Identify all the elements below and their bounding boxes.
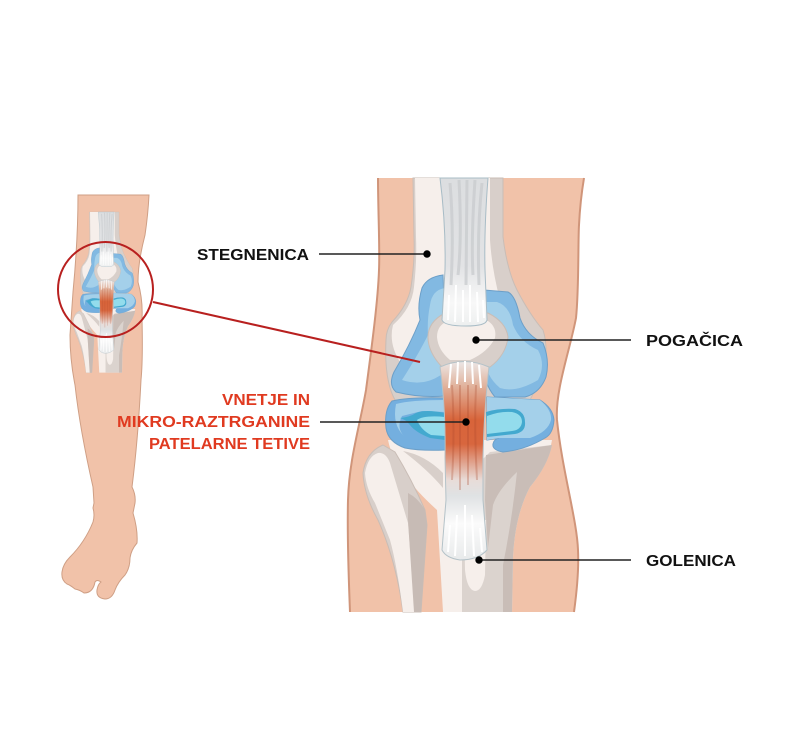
zoom connector line [153, 302, 420, 362]
label: inflammation and micro-tears: MIKRO-RAZTRGANINE [117, 414, 310, 431]
label: inflammation and micro-tears: PATELARNE TETIVE [149, 436, 310, 453]
label: pogacica [472, 331, 743, 350]
label: golenica: GOLENICA [646, 553, 736, 570]
label: pogacica: POGAČICA [646, 331, 743, 350]
skin edges [348, 178, 584, 612]
leg skin silhouette [62, 195, 149, 599]
main skin body [348, 178, 584, 612]
label: inflammation and micro-tears [117, 392, 470, 453]
magnifier circle [58, 242, 153, 337]
label: inflammation and micro-tears: VNETJE IN [222, 392, 310, 409]
label: stegnenica [197, 247, 431, 264]
small knee anatomy [73, 212, 136, 373]
main knee illustration [348, 178, 584, 612]
label: golenica [475, 553, 736, 570]
label: stegnenica: STEGNENICA [197, 247, 309, 264]
small leg illustration [58, 195, 153, 599]
knee anatomy [363, 178, 554, 612]
